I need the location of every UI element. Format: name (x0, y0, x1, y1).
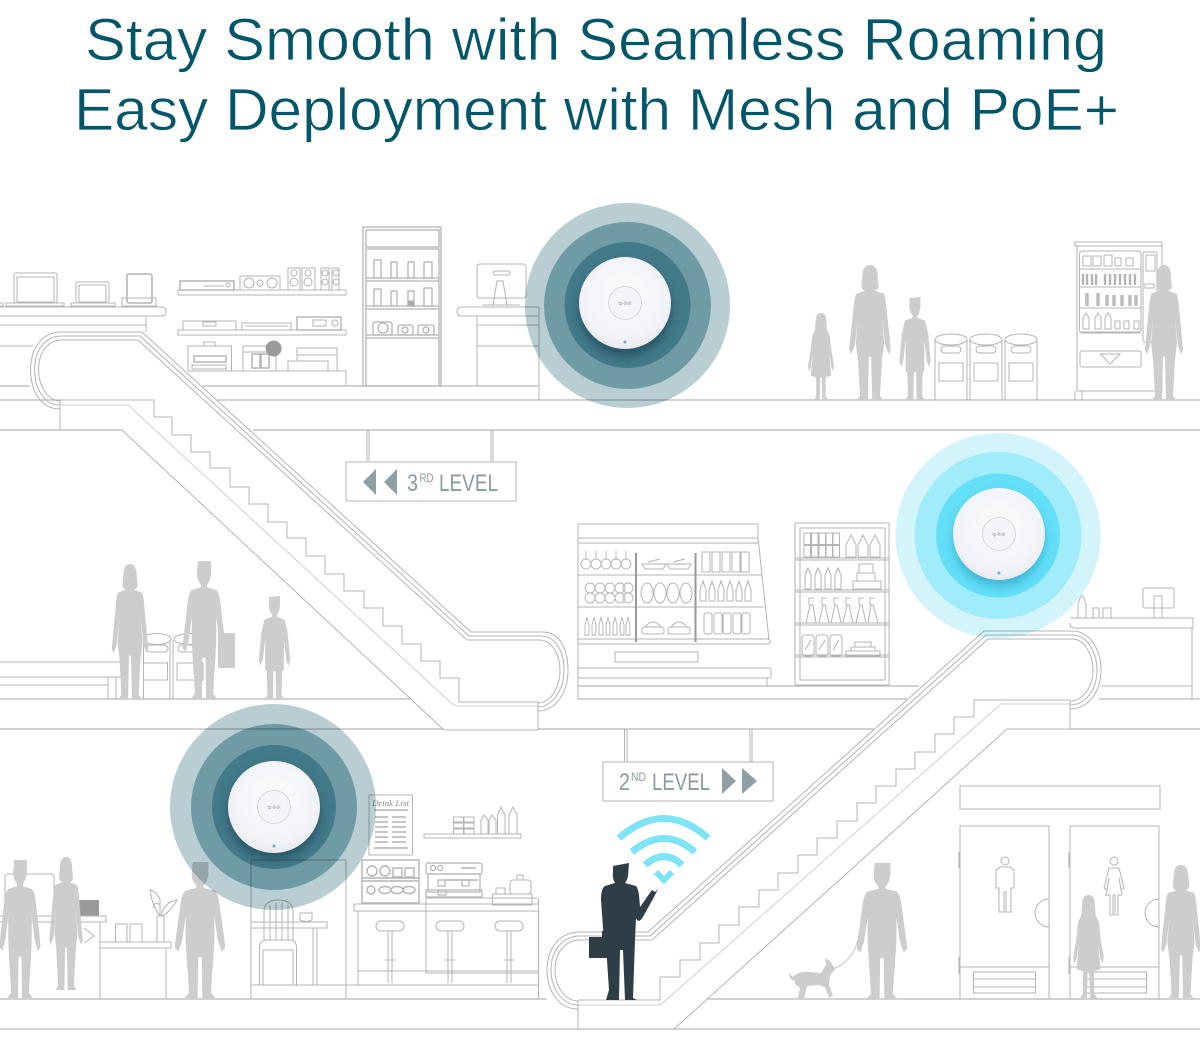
access point: first level: tp-link (267, 805, 281, 811)
access point: third level (525, 203, 730, 408)
left counter (0, 307, 166, 346)
briefcase (589, 931, 608, 958)
second level sign (603, 729, 773, 801)
escalator: second to first level (547, 631, 1101, 1029)
bench, second level left (0, 662, 122, 699)
electronics store, third level (0, 227, 539, 400)
shopping bag (218, 633, 235, 668)
floor slabs (0, 386, 1200, 1029)
third level sign: 3 (407, 470, 418, 497)
waste bins, third level (935, 334, 1037, 400)
stool (376, 921, 404, 985)
user with phone on escalator (589, 863, 658, 1000)
grey speaker dome (266, 340, 282, 356)
third level sign (346, 430, 516, 501)
signal rings (896, 433, 1100, 638)
camera cabinet (363, 227, 441, 386)
signal rings (170, 704, 376, 910)
drink list board: Drink List (371, 798, 410, 808)
wifi signal (619, 818, 708, 880)
visitors, third level right (808, 265, 931, 400)
bar counter with stools (354, 898, 538, 999)
vending machine (1075, 242, 1162, 400)
stool (436, 921, 464, 985)
fruit rows (581, 551, 633, 635)
refrigerated food display (578, 524, 771, 699)
title: Easy Deployment with Mesh and PoE+ (74, 77, 1119, 143)
women's room door (1069, 826, 1159, 999)
access point: second level, active: tp-link (992, 532, 1006, 538)
bottle and cans (1078, 596, 1111, 618)
drinks shelf (424, 807, 521, 838)
jars and bottles (700, 552, 751, 634)
shopper at vending machine (1145, 265, 1183, 400)
trays and greens (641, 559, 692, 634)
boxed products and display base (188, 342, 346, 386)
title (74, 7, 1119, 143)
family, second level left (112, 561, 290, 699)
walker, dog and restroom visitors (789, 863, 1200, 999)
icon: man (996, 857, 1014, 912)
customers at cashier and cafe (0, 857, 225, 998)
monitor (1143, 588, 1174, 618)
second level sign: ND (631, 770, 646, 784)
second level sign: LEVEL (652, 769, 710, 796)
checkout counter, second level right (1070, 588, 1193, 699)
arrows (722, 768, 757, 794)
access point: first level (170, 704, 376, 910)
flower vase (150, 890, 177, 942)
access point: second level, active (896, 433, 1100, 638)
third level sign: RD (420, 471, 434, 485)
arrows (363, 469, 397, 495)
waste bins, second level (143, 634, 206, 699)
dog (789, 958, 835, 998)
second level sign: 2 (619, 769, 630, 796)
grocery rack (795, 523, 889, 685)
access point: third level: tp-link (618, 301, 632, 307)
signal rings (525, 203, 730, 408)
escalator: third to second level (31, 332, 568, 730)
cafe table and chair (251, 860, 538, 999)
third level sign: LEVEL (439, 470, 498, 497)
title: Stay Smooth with Seamless Roaming (85, 7, 1107, 73)
audio shelves (178, 268, 346, 335)
icon: woman (1104, 857, 1124, 915)
dog leash (833, 940, 858, 969)
cafe desk and cashier area (0, 874, 177, 999)
checkout desk with monitor (457, 264, 539, 400)
pastry case and coffee machine (362, 860, 532, 905)
drink list board (369, 795, 412, 855)
men's room door (959, 826, 1049, 999)
laptops and tablet (0, 273, 156, 306)
restrooms (959, 786, 1160, 999)
stool (495, 921, 523, 985)
